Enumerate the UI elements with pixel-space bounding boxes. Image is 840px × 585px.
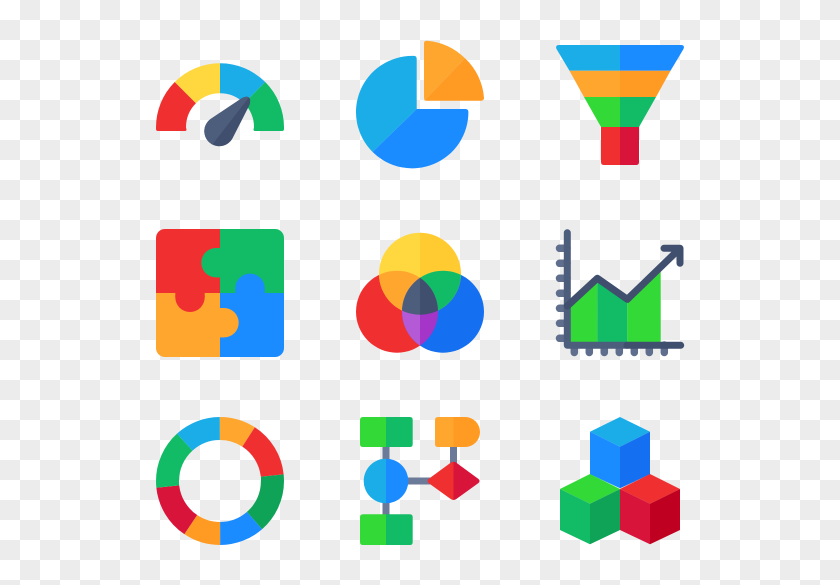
icon: venn diagram: [356, 233, 484, 353]
icon: area chart with arrow: [560, 233, 681, 352]
icon: funnel: [556, 45, 684, 165]
icon: stacked cubes: [560, 417, 680, 544]
icon: flowchart: [360, 417, 480, 545]
icon: pie chart: [356, 41, 484, 168]
icon: gauge: [156, 63, 284, 146]
icon: puzzle: [156, 229, 284, 357]
icon: donut chart: [168, 428, 272, 534]
